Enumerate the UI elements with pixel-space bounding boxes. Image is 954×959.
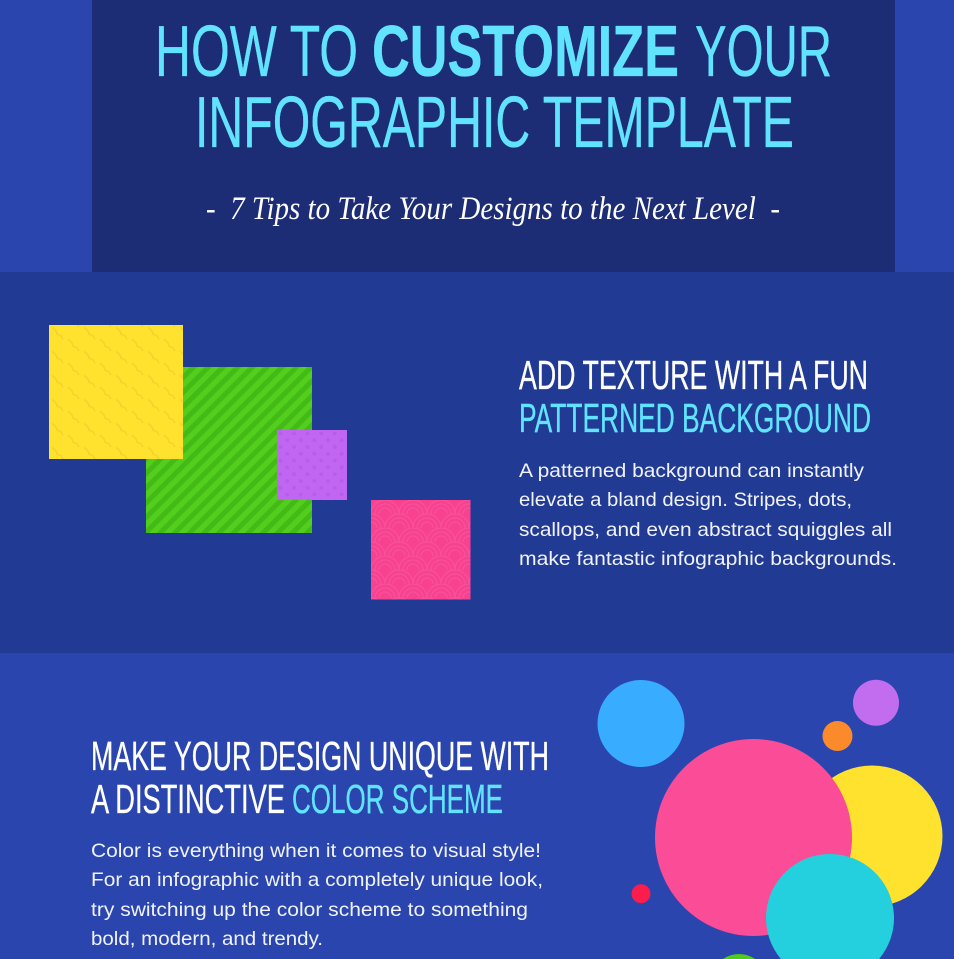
circle: yellow xyxy=(802,766,942,906)
title: HOW TO xyxy=(155,12,358,92)
circle: cyan xyxy=(766,854,894,959)
title xyxy=(155,12,832,163)
title: YOUR xyxy=(695,12,832,92)
body text: patterned background: scallops, and even abstract squiggles all xyxy=(519,519,892,541)
circle: purple xyxy=(853,680,899,726)
section: color scheme xyxy=(0,653,954,959)
purple dotted square xyxy=(277,430,347,500)
circle: red xyxy=(632,884,650,903)
heading: color scheme: MAKE YOUR DESIGN UNIQUE WITH xyxy=(91,733,549,779)
circle: pink xyxy=(655,739,852,936)
body text: patterned background xyxy=(519,460,897,570)
body text: color scheme: Color is everything when it comes to visual style! xyxy=(91,840,541,862)
body text: color scheme xyxy=(91,840,543,950)
title: CUSTOMIZE xyxy=(372,12,679,92)
circle: green xyxy=(723,954,755,959)
yellow squiggle square xyxy=(49,325,183,459)
heading: color scheme: COLOR SCHEME xyxy=(292,776,503,822)
heading: color scheme xyxy=(91,733,549,822)
section: patterned background xyxy=(0,272,954,653)
body text: color scheme: For an infographic with a completely unique look, xyxy=(91,869,543,891)
green striped square xyxy=(146,367,312,533)
header panel xyxy=(92,0,895,272)
page background xyxy=(0,0,954,272)
heading: color scheme: A DISTINCTIVE xyxy=(91,776,285,822)
heading: patterned background xyxy=(519,352,871,441)
subtitle: - 7 Tips to Take Your Designs to the Next Level - xyxy=(206,191,780,227)
body text: patterned background: elevate a bland design. Stripes, dots, xyxy=(519,489,852,511)
circle: blue xyxy=(598,680,684,767)
body text: color scheme: bold, modern, and trendy. xyxy=(91,928,323,950)
circle: orange xyxy=(822,721,852,751)
body text: color scheme: try switching up the color scheme to something xyxy=(91,899,528,921)
pink scallop square xyxy=(371,500,470,600)
body text: patterned background: A patterned background can instantly xyxy=(519,460,864,482)
body text: patterned background: make fantastic infographic backgrounds. xyxy=(519,548,897,570)
